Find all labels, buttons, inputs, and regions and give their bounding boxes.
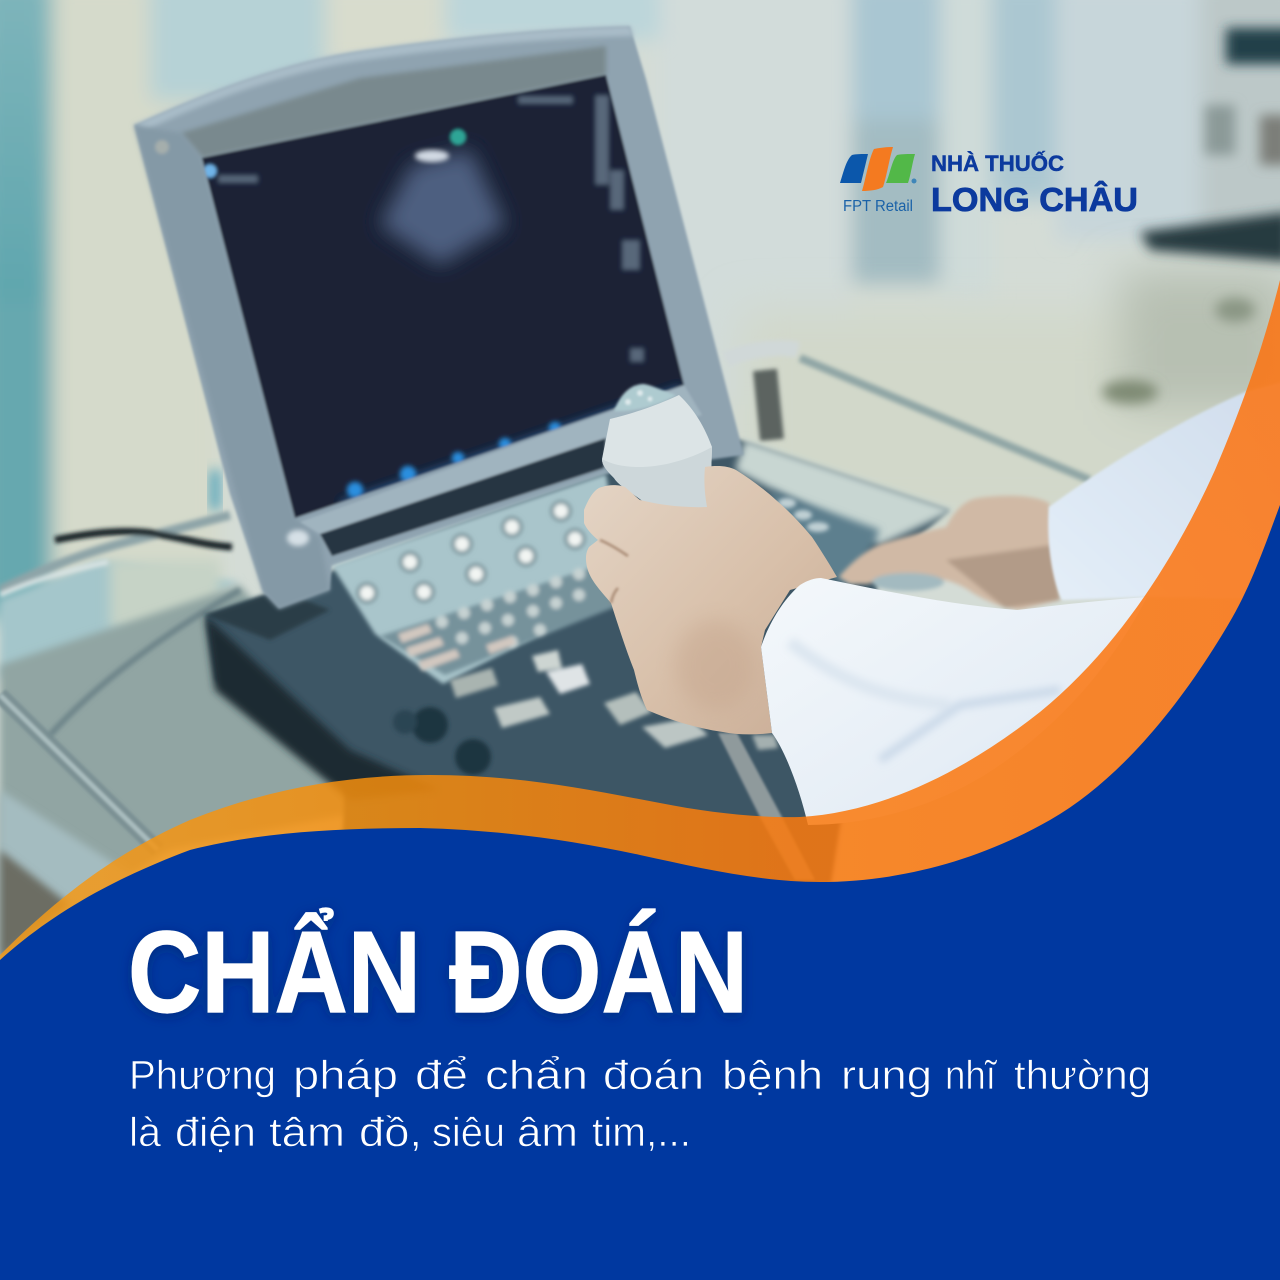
blue wave panel bbox=[0, 505, 1280, 1280]
body line 1: bệnh bbox=[722, 1052, 823, 1098]
body line 2: siêu bbox=[432, 1109, 505, 1155]
body text bbox=[129, 1052, 1151, 1155]
body line 2: tim,... bbox=[592, 1109, 691, 1155]
knobs bbox=[393, 707, 491, 775]
body line 1: để bbox=[415, 1052, 468, 1098]
floor behind the machine bbox=[740, 270, 1280, 530]
body line 1: thường bbox=[1014, 1052, 1151, 1098]
right hand on console, blurred bbox=[839, 496, 1060, 610]
body line 1: nhĩ bbox=[945, 1052, 997, 1098]
body line 1 bbox=[129, 1052, 1151, 1098]
body line 1: pháp bbox=[293, 1052, 398, 1098]
ultrasound image bbox=[380, 129, 505, 265]
control panel with keys bbox=[332, 474, 778, 775]
body line 2: điện bbox=[175, 1109, 256, 1155]
lab coat sleeve bbox=[761, 578, 1147, 825]
round buttons bbox=[356, 500, 586, 604]
FPT Retail wordmark: FPT Retail bbox=[843, 198, 913, 215]
body line 1: chẩn bbox=[485, 1052, 588, 1098]
body line 1: Phương bbox=[129, 1052, 276, 1098]
body line 2: đồ, bbox=[359, 1109, 422, 1155]
function buttons bbox=[450, 650, 778, 750]
body line 2: âm bbox=[517, 1109, 578, 1155]
left hand holding probe bbox=[584, 466, 837, 734]
body line 2: là bbox=[129, 1109, 161, 1155]
monitor screen bbox=[202, 75, 686, 520]
probe cable bbox=[718, 733, 815, 880]
right sleeve, blurred bbox=[1048, 380, 1280, 600]
table surface bbox=[0, 585, 420, 960]
ultrasound probe bbox=[602, 384, 712, 508]
cables and handle rails bbox=[0, 348, 1090, 735]
logo: FPT Retail and Nhà thuốc Long Châu bbox=[840, 147, 1138, 218]
Long Châu label: LONG CHÂU bbox=[931, 181, 1138, 218]
ultrasound console base bbox=[205, 440, 955, 890]
Nhà thuốc label: NHÀ THUỐC bbox=[931, 150, 1064, 176]
icon: FPT tricolor mark bbox=[840, 147, 916, 191]
body line 2 bbox=[129, 1109, 691, 1155]
title: CHẨN ĐOÁN bbox=[128, 907, 748, 1037]
body line 1: đoán bbox=[603, 1052, 704, 1098]
body line 1: rung bbox=[841, 1052, 932, 1098]
shelves at top right bbox=[1102, 28, 1280, 404]
body line 2: tâm bbox=[269, 1109, 345, 1155]
orange wave band bbox=[0, 280, 1280, 1280]
background photo: ultrasound machine bbox=[0, 0, 1280, 960]
keyboard keys bbox=[380, 565, 620, 675]
monitor bbox=[134, 26, 744, 609]
